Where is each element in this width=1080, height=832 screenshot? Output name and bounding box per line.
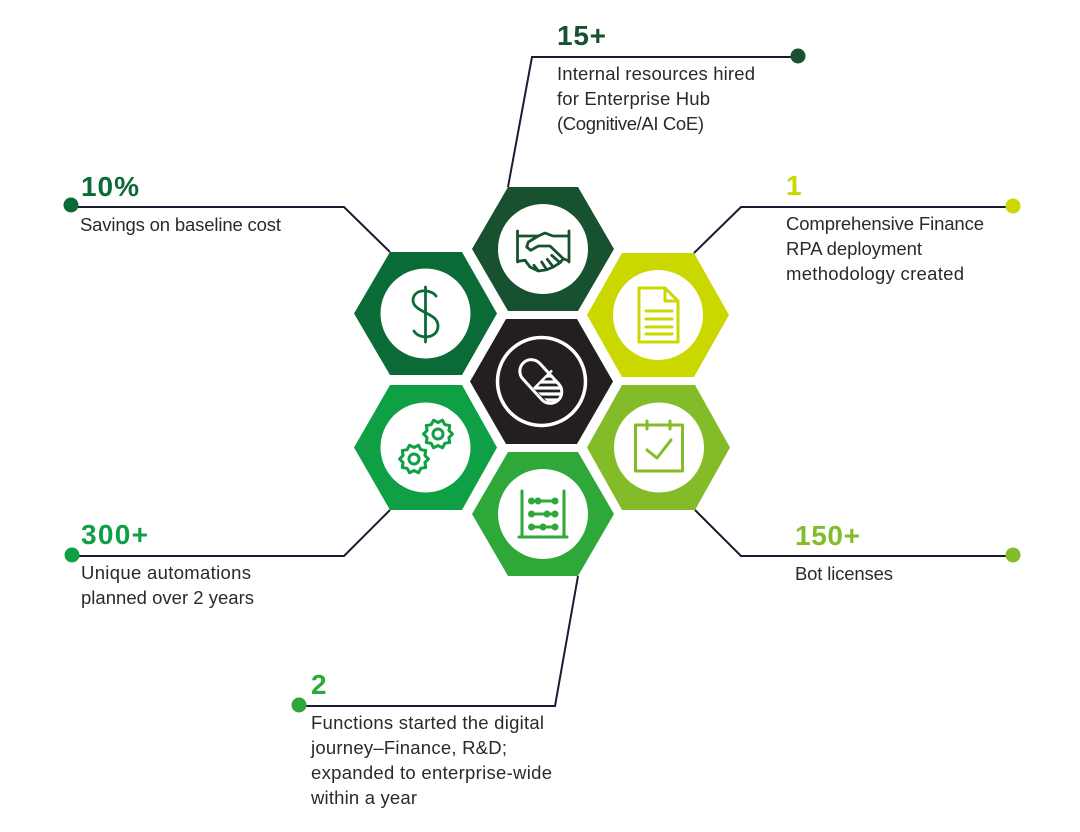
callout: 300+ automations — [64, 510, 390, 608]
callout: 2 functions — [292, 576, 578, 808]
hexagon: handshake — [472, 187, 614, 311]
callout: 2 functions: Functions started the digital — [311, 712, 544, 733]
callout: 1 methodology — [694, 170, 1020, 284]
callout: 2 functions: journey–Finance, R&D; — [310, 737, 507, 758]
callout: 150+ bot licenses: Bot licenses — [795, 563, 893, 584]
hexagon: abacus — [472, 452, 614, 576]
callout: 2 functions: within a year — [310, 787, 417, 808]
callout: 15+ internal resources: for Enterprise Hub — [557, 88, 710, 109]
callout: 1 methodology: Comprehensive Finance — [786, 213, 984, 234]
icon: pill — [518, 358, 564, 405]
callout: 300+ automations: planned over 2 years — [81, 587, 254, 608]
callout: 15+ internal resources: 15+ — [557, 20, 606, 51]
hexagon: center pill — [470, 319, 613, 444]
hexagon: gears — [354, 385, 497, 510]
callout: 10% savings: Savings on baseline cost — [80, 214, 281, 235]
callout: 1 methodology: 1 — [786, 170, 802, 201]
callout: 150+ bot licenses — [695, 510, 1020, 584]
icon: gears — [400, 420, 452, 473]
icon: handshake — [518, 231, 569, 271]
callout: 15+ internal resources — [508, 20, 806, 187]
hexagon: calendar — [587, 385, 730, 510]
callout: 15+ internal resources: (Cognitive/AI CoE) — [557, 113, 704, 134]
callout: 10% savings: 10% — [81, 171, 139, 202]
callout: 300+ automations: 300+ — [81, 519, 148, 550]
callout: 300+ automations: Unique automations — [81, 562, 251, 583]
callout: 15+ internal resources: Internal resources hired — [557, 63, 755, 84]
icon: document — [639, 288, 678, 342]
hexagon: dollar — [354, 252, 497, 375]
icon: abacus — [519, 491, 567, 537]
callout: 1 methodology: methodology created — [786, 263, 964, 284]
hexagon: document — [587, 253, 729, 377]
callout: 2 functions: expanded to enterprise-wide — [311, 762, 552, 783]
callout: 1 methodology: RPA deployment — [786, 238, 922, 259]
callout: 150+ bot licenses: 150+ — [795, 520, 860, 551]
icon: calendar check — [636, 421, 682, 471]
icon: dollar sign — [413, 287, 438, 342]
callout: 2 functions: 2 — [311, 669, 327, 700]
callout: 10% savings — [64, 171, 390, 252]
